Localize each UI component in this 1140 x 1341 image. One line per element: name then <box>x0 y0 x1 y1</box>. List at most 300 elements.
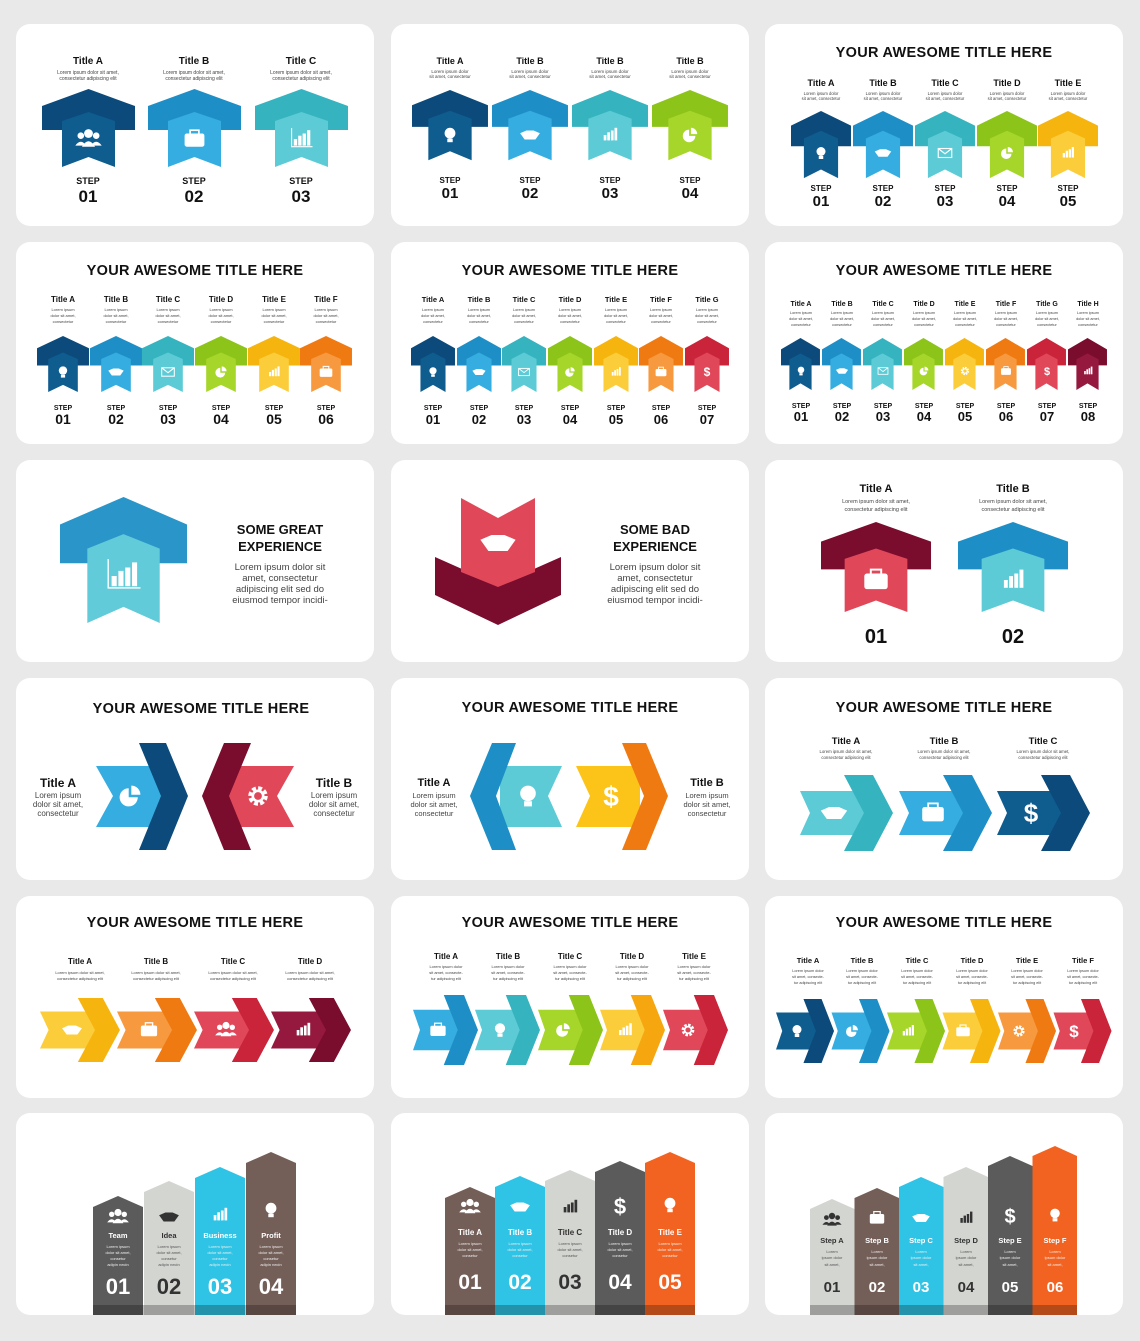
lorem: Lorem ipsum <box>608 1241 632 1246</box>
numbers: 01 <box>865 626 887 648</box>
step labels: STEP <box>997 403 1015 410</box>
lorem: consectetur adipiscing elit <box>845 507 908 513</box>
arrows <box>800 775 1090 851</box>
step labels: 04 <box>563 412 578 427</box>
lorem <box>57 70 332 82</box>
labels: Profit <box>261 1231 281 1240</box>
lorem: consectetur <box>1078 323 1099 327</box>
lorem <box>842 499 1047 513</box>
titles <box>436 56 704 66</box>
numbers <box>106 1274 284 1299</box>
arrows <box>776 999 1112 1063</box>
text block: Lorem ipsum dolor sit <box>235 562 326 573</box>
step labels: STEP <box>520 176 541 185</box>
titles: Title B <box>996 483 1030 495</box>
numbers <box>458 1271 682 1294</box>
titles: Title C <box>286 56 316 67</box>
lorem: Lorem ipsum dolor <box>792 969 824 973</box>
titles: Title B <box>144 957 168 966</box>
titles: Title E <box>955 301 976 308</box>
lorem: Lorem ipsum <box>262 307 286 312</box>
icons <box>822 1206 1060 1228</box>
lorem: consectetur <box>423 320 444 324</box>
lorem: consectetur adipiscing elit <box>287 976 334 981</box>
titles: Title B <box>104 295 128 304</box>
titles: Title C <box>513 295 536 304</box>
arrow 2 <box>148 89 241 167</box>
lorem: dolor sit amet, <box>604 314 628 318</box>
lorem: consectetur <box>996 323 1017 327</box>
lorem: Lorem ipsum <box>106 1244 130 1249</box>
titles: Title F <box>650 295 672 304</box>
lorem: ipsum dolor <box>956 1255 977 1260</box>
panel: 4 horizontal arrows <box>16 896 374 1098</box>
titles: Title A <box>73 56 103 67</box>
lorem: Lorem ipsum dolor sit amet, <box>917 749 971 754</box>
icons <box>430 1023 693 1037</box>
lorem: sit amet, consecte- <box>1011 975 1044 979</box>
lorem: Lorem ipsum dolor <box>429 964 463 969</box>
lorem: dolor sit amet, <box>313 313 339 318</box>
lorem: consectetur <box>469 320 490 324</box>
icon: handshake <box>480 535 516 551</box>
lorem: Lorem ipsum dolor sit amet, <box>819 749 873 754</box>
text B: consectetur <box>313 809 355 818</box>
lorem: Lorem ipsum dolor sit amet, <box>842 499 910 505</box>
lorem: dolor sit amet, <box>695 314 719 318</box>
lorem: consectetur <box>606 320 627 324</box>
panel: opposing arrows <box>391 678 749 880</box>
lorem: Lorem ipsum <box>513 308 535 312</box>
lorem: Lorem ipsum <box>1036 311 1058 315</box>
lorem: Lorem <box>960 1249 972 1254</box>
step labels: STEP <box>997 184 1018 193</box>
lorem: adipin necin <box>107 1262 129 1267</box>
numbers: 03 <box>558 1271 582 1294</box>
titles: Title F <box>1072 956 1094 965</box>
text B: consectetur <box>688 809 727 818</box>
lorem: dolor sit amet, <box>912 317 936 321</box>
lorem: sit amet, consecte- <box>792 975 825 979</box>
lorem <box>50 307 339 324</box>
lorem: adipin necin <box>158 1262 180 1267</box>
text block: Lorem ipsum dolor sit <box>610 562 701 573</box>
step labels: STEP <box>1079 403 1097 410</box>
lorem: dolor sit amet, <box>156 1250 182 1255</box>
panel: 8 steps <box>765 242 1123 444</box>
lorem: Lorem ipsum dolor <box>1011 969 1043 973</box>
lorem: Lorem ipsum <box>954 311 976 315</box>
lorem: sit amet, consecte- <box>1067 975 1100 979</box>
lorem: Lorem ipsum dolor <box>677 964 711 969</box>
lorem: dolor sit amet, <box>50 313 76 318</box>
titles: Title A <box>68 957 92 966</box>
panel: two arrows <box>765 460 1123 662</box>
titles <box>68 957 322 966</box>
titles: Title B <box>869 78 897 88</box>
lorem: dolor sit amet, <box>421 314 445 318</box>
lorem: sit amet, <box>824 1262 840 1267</box>
step labels: STEP <box>265 405 283 412</box>
lorem: Lorem ipsum <box>872 311 894 315</box>
text block: adipiscing elit sed do <box>236 584 324 595</box>
arrow 3 <box>255 89 348 167</box>
titles: Title A <box>790 301 812 308</box>
lorem: Lorem ipsum dolor <box>511 69 549 74</box>
lorem: consetur <box>161 1256 177 1261</box>
icon: chart <box>108 559 140 588</box>
lorem <box>819 749 1070 760</box>
step labels: 04 <box>999 193 1016 210</box>
titles: Title D <box>993 78 1021 88</box>
titles: Title F <box>314 295 338 304</box>
titles: Title A <box>797 956 820 965</box>
lorem: Lorem ipsum dolor <box>591 69 629 74</box>
text B: Title B <box>690 777 724 789</box>
step labels: STEP <box>515 405 533 412</box>
lorem: ipsum dolor <box>911 1255 932 1260</box>
titles: Title E <box>1016 956 1038 965</box>
lorem: tur adipiscing elit <box>903 981 932 985</box>
lorem: ipsum dolor <box>867 1255 888 1260</box>
lorem: Lorem ipsum dolor <box>901 969 933 973</box>
step labels: 01 <box>55 411 71 427</box>
lorem: dolor sit amet, <box>1035 317 1059 321</box>
numbers: 01 <box>458 1271 482 1294</box>
icons <box>821 798 1039 828</box>
lorem: sit amet, consecte- <box>491 970 525 975</box>
step labels: STEP <box>698 405 716 412</box>
big down arrow <box>435 498 561 625</box>
lorem: dolor sit amet, <box>208 313 234 318</box>
text B: Lorem ipsum <box>311 791 357 800</box>
titles: Title E <box>262 295 287 304</box>
step labels: 07 <box>1040 409 1054 424</box>
text block: SOME BAD <box>620 522 690 537</box>
step labels: STEP <box>935 184 956 193</box>
panel: 6 steps <box>16 242 374 444</box>
lorem: consectetur adipiscing elit <box>165 76 223 82</box>
lorem: Lorem ipsum dolor <box>491 964 525 969</box>
lorem: dolor sit amet, <box>558 314 582 318</box>
lorem: consectetur adipiscing elit <box>821 755 871 760</box>
titles: Title D <box>961 956 984 965</box>
text A <box>410 777 458 818</box>
panel: 7 steps <box>391 242 749 444</box>
titles: Title C <box>221 957 245 966</box>
lorem: sit amet, consecte- <box>615 970 649 975</box>
lorem: sit amet, consecte- <box>846 975 879 979</box>
lorem: Lorem ipsum <box>157 1244 181 1249</box>
lorem: sit amet, consectetur <box>429 74 471 79</box>
lorem: dolor sit amet, <box>830 317 854 321</box>
lorem: Lorem ipsum dolor <box>553 964 587 969</box>
lorem: Lorem ipsum <box>422 308 444 312</box>
text block: EXPERIENCE <box>613 539 697 554</box>
text A: consectetur <box>415 809 454 818</box>
lorem <box>789 311 1100 327</box>
lorem: Lorem ipsum dolor <box>1051 91 1086 96</box>
lorem: Lorem ipsum dolor sit amet, <box>270 70 332 76</box>
arrows <box>413 995 728 1065</box>
numbers: 04 <box>259 1274 284 1299</box>
lorem: consectetur adipiscing elit <box>1018 755 1068 760</box>
lorem: sit amet, <box>1047 1262 1063 1267</box>
titles: Title E <box>1055 78 1081 88</box>
step labels: 01 <box>442 185 458 202</box>
lorem: consectetur <box>955 323 976 327</box>
lorem: consetur <box>462 1253 478 1258</box>
numbers: 03 <box>208 1274 232 1299</box>
titles <box>51 295 338 304</box>
lorem: dolor sit amet, <box>105 1250 131 1255</box>
lorem: Lorem ipsum <box>208 1244 232 1249</box>
lorem: Lorem ipsum <box>831 311 853 315</box>
titles: Title D <box>209 295 233 304</box>
lorem: Lorem ipsum <box>696 308 718 312</box>
labels: Step A <box>820 1236 844 1245</box>
titles <box>790 301 1099 308</box>
icons: $ <box>614 1194 626 1219</box>
lorem: ipsum dolor <box>1000 1255 1021 1260</box>
icons <box>445 128 697 142</box>
icons <box>798 366 1092 378</box>
icons <box>62 1022 310 1036</box>
arrow A <box>821 522 931 612</box>
lorem: tur adipiscing elit <box>958 981 987 985</box>
panel: 5 bars <box>391 1113 749 1315</box>
step labels: 05 <box>609 412 623 427</box>
lorem: Lorem ipsum dolor <box>866 91 901 96</box>
bars <box>445 1152 695 1315</box>
text A: dolor sit amet, <box>410 800 458 809</box>
lorem: sit amet, consecte- <box>956 975 989 979</box>
step labels: 07 <box>700 412 714 427</box>
text B <box>309 776 359 818</box>
lorem: consectetur <box>158 319 179 324</box>
step labels: 03 <box>876 409 890 424</box>
step labels: STEP <box>607 405 625 412</box>
panel: great experience <box>16 460 374 662</box>
text block: eiusmod tempor incidi- <box>232 595 328 606</box>
left arrow <box>470 743 562 850</box>
titles: Title B <box>596 56 624 66</box>
step labels: 05 <box>1060 193 1076 210</box>
titles <box>832 736 1058 747</box>
panel: 3 steps <box>16 24 374 226</box>
numbers: 03 <box>913 1279 929 1296</box>
step labels: STEP <box>600 176 621 185</box>
titles: Title B <box>179 56 209 67</box>
lorem: consectetur <box>873 323 894 327</box>
lorem: dolor sit amet, <box>649 314 673 318</box>
lorem: Lorem ipsum dolor <box>615 964 649 969</box>
titles: Title B <box>468 295 491 304</box>
panel: facing chevrons <box>16 678 374 880</box>
titles <box>859 483 1030 495</box>
titles: Title D <box>620 952 644 961</box>
labels: Step F <box>1044 1236 1067 1245</box>
lorem: consectetur adipiscing elit <box>59 76 117 82</box>
labels: Title A <box>458 1228 482 1237</box>
titles: Title C <box>872 301 894 308</box>
right arrow <box>576 743 668 850</box>
lorem: sit amet, consecte- <box>677 970 711 975</box>
panel: 3 horizontal arrows <box>765 678 1123 880</box>
arrows <box>411 336 729 392</box>
titles: Title C <box>156 295 180 304</box>
lorem: dolor sit amet, <box>103 313 129 318</box>
step labels: 04 <box>682 185 699 202</box>
icon: chart <box>292 128 312 147</box>
numbers: 05 <box>658 1271 682 1294</box>
step labels: STEP <box>915 403 933 410</box>
text block: eiusmod tempor incidi- <box>607 595 703 606</box>
lorem: Lorem <box>826 1249 838 1254</box>
lorem: sit amet, consectetur <box>926 96 965 101</box>
step labels: STEP <box>470 405 488 412</box>
lorem: adipin necin <box>260 1262 282 1267</box>
bars <box>810 1146 1077 1315</box>
lorem <box>457 1241 683 1258</box>
icons: $ <box>1069 1022 1079 1041</box>
heading: YOUR AWESOME TITLE HERE <box>462 700 678 716</box>
lorem: consectetur <box>316 319 337 324</box>
lorem: Lorem ipsum <box>913 311 935 315</box>
step labels: STEP <box>652 405 670 412</box>
lorem: consectetur adipiscing elit <box>210 976 257 981</box>
lorem: Lorem ipsum <box>51 307 75 312</box>
icons: $ <box>603 781 619 812</box>
labels: Step C <box>909 1236 933 1245</box>
numbers <box>865 626 1024 648</box>
lorem <box>55 970 335 981</box>
lorem: sit amet, consecte- <box>553 970 587 975</box>
labels: Step D <box>954 1236 978 1245</box>
panel: 5 steps <box>765 24 1123 226</box>
lorem: consectetur <box>514 320 535 324</box>
lorem: Lorem ipsum <box>156 307 180 312</box>
lorem: tur adipiscing elit <box>431 976 462 981</box>
numbers <box>824 1279 1063 1296</box>
step labels: 01 <box>79 187 97 206</box>
titles: Title C <box>906 956 929 965</box>
lorem: consetur <box>612 1253 628 1258</box>
lorem: sit amet, <box>1002 1262 1018 1267</box>
panel: 6 bars <box>765 1113 1123 1315</box>
text A <box>33 776 83 818</box>
icons: $ <box>1024 798 1039 828</box>
lorem <box>105 1244 284 1267</box>
numbers: 02 <box>508 1271 532 1294</box>
lorem: dolor sit amet, <box>607 1247 633 1252</box>
lorem: Lorem ipsum dolor sit amet, <box>208 970 258 975</box>
heading: YOUR AWESOME TITLE HERE <box>836 700 1052 716</box>
text block: EXPERIENCE <box>238 539 322 554</box>
text B <box>683 777 731 818</box>
heading: YOUR AWESOME TITLE HERE <box>93 701 309 717</box>
lorem: Lorem ipsum dolor <box>928 91 963 96</box>
lorem <box>421 308 719 324</box>
text A: Lorem ipsum <box>35 791 81 800</box>
lorem: sit amet, consectetur <box>1049 96 1088 101</box>
lorem: dolor sit amet, <box>507 1247 533 1252</box>
lorem <box>429 964 711 981</box>
icons <box>120 786 266 806</box>
lorem: sit amet, consectetur <box>589 74 631 79</box>
titles: Title F <box>996 301 1017 308</box>
numbers: 02 <box>869 1279 885 1296</box>
lorem: Lorem ipsum dolor sit amet, <box>131 970 181 975</box>
step labels: 03 <box>292 187 310 206</box>
bars <box>93 1152 296 1315</box>
lorem: Lorem ipsum <box>259 1244 283 1249</box>
panel: 4 steps <box>391 24 749 226</box>
labels: Title E <box>658 1228 683 1237</box>
step labels: STEP <box>440 176 461 185</box>
text A: Title A <box>40 776 76 790</box>
lorem: Lorem ipsum dolor sit amet, <box>979 499 1047 505</box>
numbers: 01 <box>106 1274 130 1299</box>
lorem: sit amet, <box>913 1262 929 1267</box>
arrows <box>40 998 351 1062</box>
titles: Title D <box>559 295 582 304</box>
step labels: 03 <box>602 185 618 202</box>
lorem: sit amet, consecte- <box>901 975 934 979</box>
step labels: STEP <box>76 176 100 186</box>
arrow B <box>958 522 1068 612</box>
lorem: Lorem ipsum dolor sit amet, <box>285 970 335 975</box>
titles: Title A <box>51 295 75 304</box>
lorem: Lorem ipsum <box>995 311 1017 315</box>
step labels: 06 <box>654 412 668 427</box>
step labels: 02 <box>472 412 486 427</box>
icons <box>429 365 711 379</box>
step labels: STEP <box>1058 184 1079 193</box>
lorem: consectetur <box>53 319 74 324</box>
lorem: Lorem ipsum <box>790 311 812 315</box>
numbers: 02 <box>157 1274 181 1299</box>
text block <box>232 522 328 606</box>
lorem: consetur <box>662 1253 678 1258</box>
lorem: Lorem ipsum <box>314 307 338 312</box>
heading: YOUR AWESOME TITLE HERE <box>87 263 303 279</box>
step labels: STEP <box>873 184 894 193</box>
heading: YOUR AWESOME TITLE HERE <box>836 45 1052 61</box>
labels: Step E <box>998 1236 1022 1245</box>
lorem: Lorem ipsum <box>468 308 490 312</box>
step labels: 03 <box>937 193 953 210</box>
titles: Title E <box>605 295 627 304</box>
right arrow <box>202 743 294 850</box>
titles <box>73 56 316 67</box>
lorem: Lorem ipsum dolor <box>846 969 878 973</box>
lorem: consectetur <box>832 323 853 327</box>
titles: Title B <box>516 56 544 66</box>
lorem: Lorem ipsum <box>458 1241 482 1246</box>
arrows <box>412 90 728 160</box>
lorem: Lorem ipsum <box>658 1241 682 1246</box>
panel: 4 bars <box>16 1113 374 1315</box>
arrows <box>37 336 352 392</box>
icons: $ <box>1004 1206 1016 1228</box>
text A: Lorem ipsum <box>412 791 456 800</box>
labels: Team <box>108 1231 128 1240</box>
lorem: Lorem ipsum <box>558 1241 582 1246</box>
lorem <box>822 1249 1066 1267</box>
lorem: consectetur <box>651 320 672 324</box>
lorem: Lorem ipsum <box>508 1241 532 1246</box>
